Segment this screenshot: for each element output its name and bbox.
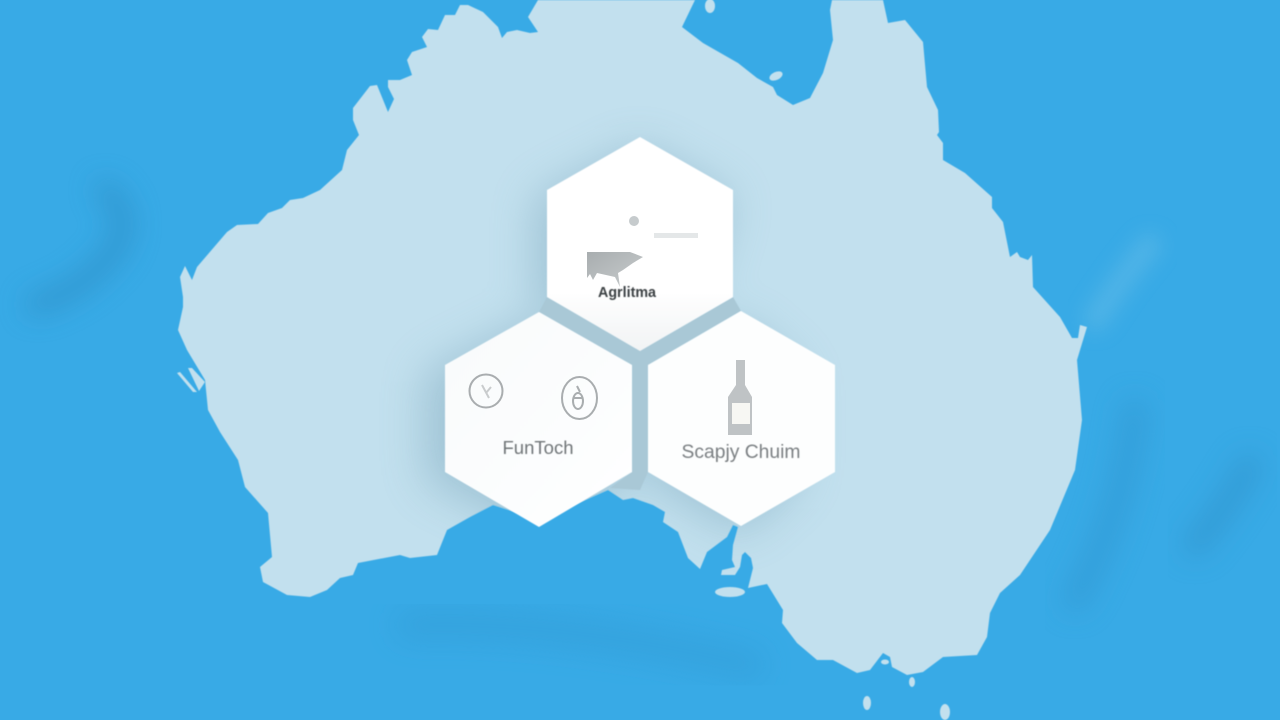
hexagon shadows on land — [425, 145, 800, 535]
label: FinTech: FunToch — [502, 438, 574, 458]
blurred sea shadows — [35, 190, 1250, 665]
icon: cow — [587, 252, 643, 287]
panel: FinTech hexagon — [445, 312, 632, 527]
icon: small dot — [629, 216, 639, 226]
map: islands — [177, 0, 950, 720]
icon: bottle label — [732, 403, 750, 424]
icon: right circle — [562, 377, 597, 419]
label: Supply Chain: Scapjy Chuim — [682, 442, 800, 463]
gap between hexagons — [539, 297, 741, 490]
label: Agriculture: Agrlitma — [598, 284, 657, 301]
map: Australia mainland — [178, 0, 1087, 675]
icon: pale bar — [654, 233, 698, 238]
icon: left circle — [470, 374, 502, 408]
panel: Agriculture hexagon — [547, 137, 733, 351]
icon: bottle — [728, 360, 752, 435]
panel: Supply Chain hexagon — [648, 311, 835, 526]
